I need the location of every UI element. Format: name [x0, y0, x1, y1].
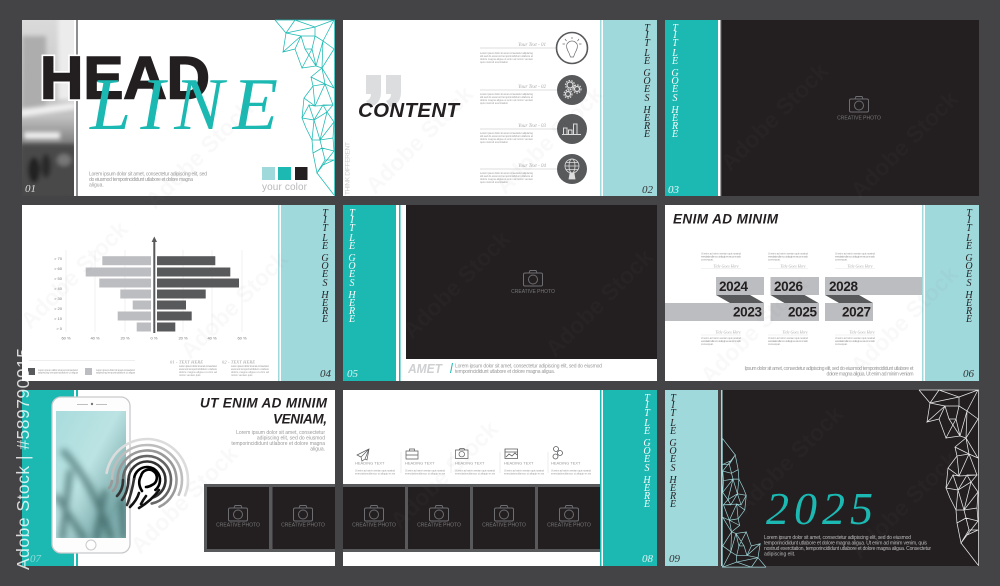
icon: camera	[456, 448, 468, 458]
body text: Lorem ipsum dolor sit amet, consectetur adipiscing elit, sed do eiusmod	[764, 535, 911, 541]
feature text 2: Ut enim ad minim veniam quis nostrud	[405, 468, 446, 472]
notes: 01 - TEXT HERE	[170, 360, 203, 364]
watermarks: Adobe Stock	[360, 81, 478, 199]
notes: dolore magna aligua ut enim ad	[231, 370, 270, 374]
side caption: THINK DIFFERENT	[344, 142, 352, 195]
list item 4: dolore magna aligua ut enim ad minim veniam	[480, 177, 533, 181]
feature text 1: HEADING TEXT	[355, 460, 385, 466]
x labels: 20 %	[178, 336, 188, 340]
page number: 03	[668, 184, 680, 196]
polygon mesh	[275, 20, 334, 196]
feature text 4: Ut enim ad minim veniam quis nostrud	[504, 468, 545, 472]
timeline notes below: Ut enim ad minim veniam quis nostrud	[835, 336, 876, 340]
panel: slide 06 timeline	[665, 205, 979, 381]
watermarks: Adobe Stock	[540, 244, 658, 362]
panel: slide 07 phone	[22, 390, 335, 566]
feature text 2: exercitationullamco ut aliquip ex ea	[405, 472, 446, 476]
notes: eiusmod temporincididunt ut labore	[231, 367, 270, 371]
watermarks: Adobe Stock	[845, 86, 963, 204]
x labels	[61, 336, 247, 340]
list item 3	[480, 124, 557, 144]
timeline notes above: Ut enim ad minim veniam quis nostrud	[701, 252, 742, 256]
polygon mesh: left	[722, 438, 766, 567]
timeline notes below: exercitationullamco ut aliquip ex ea commodo	[701, 339, 742, 343]
list item 3: Your Text - 03	[518, 124, 546, 129]
timeline notes below: consequat.	[768, 342, 781, 346]
panel: slide 02 content	[343, 20, 657, 196]
panel: slide 08 photos	[343, 390, 657, 566]
list item 4: Your Text - 04	[518, 164, 546, 169]
x labels: 60 %	[237, 336, 247, 340]
panel: slide 09 closing	[665, 390, 979, 567]
watermarks: Adobe Stock	[125, 441, 243, 559]
photo strip: CREATIVE PHOTO	[417, 522, 461, 528]
photo placeholder label: CREATIVE PHOTO	[511, 289, 555, 295]
feature text 3	[451, 452, 496, 476]
timeline notes above: consequat.	[701, 258, 714, 262]
list item 2: Lorem ipsum dolor sit amet consectetur adipiscing	[480, 92, 534, 96]
body text: Lorem ipsum dolor sit amet, consectetur	[236, 430, 325, 436]
x labels: 20 %	[120, 336, 130, 340]
y labels: > 40	[54, 286, 63, 291]
watermarks: Adobe Stock	[175, 246, 293, 364]
timeline notes below: Title Goes Here	[849, 330, 875, 334]
y labels: > 10	[54, 316, 63, 321]
timeline notes above: Title Goes Here	[780, 264, 806, 268]
quote mark	[366, 75, 401, 107]
photo strip: CREATIVE PHOTO	[281, 522, 325, 528]
page number: 07	[30, 553, 42, 565]
body text: adipiscing elit.	[764, 552, 795, 558]
polygon mesh: right	[919, 390, 978, 566]
colour swatches	[262, 167, 308, 193]
year: 2025	[766, 483, 873, 534]
body text	[764, 535, 931, 558]
timeline notes below: exercitationullamco ut aliquip ex ea commodo	[835, 339, 876, 343]
list item 4: Lorem ipsum dolor sit amet consectetur adipiscing	[480, 171, 534, 175]
headline: HEAD: HEAD	[40, 44, 210, 112]
vertical title: TITLE GOES HERE	[320, 208, 329, 325]
timeline notes below: consequat.	[701, 342, 714, 346]
feature text 4	[500, 452, 545, 476]
notes: 02 - TEXT HERE	[222, 360, 255, 364]
legend: adipiscing temporincididunt ut aligua	[38, 370, 79, 374]
heading: CONTENT	[358, 99, 460, 122]
timeline notes below: Title Goes Here	[782, 330, 808, 334]
feature text 5: Ut enim ad minim veniam quis nostrud	[551, 468, 592, 472]
stock id watermark: Adobe Stock | #589790915	[13, 348, 33, 570]
photo strip	[204, 484, 335, 552]
body text: adipiscing elit, sed do eiusmod	[257, 436, 325, 442]
legend: Lorem ipsum dolor sit amet consectetur	[96, 368, 135, 372]
heading	[200, 396, 328, 426]
list item 3: Lorem ipsum dolor sit amet consectetur adipiscing	[480, 131, 534, 135]
body text: dolore magna aligua. Ut enim ad minim veniam	[826, 372, 914, 378]
colour swatches: your color	[262, 182, 308, 193]
notes: dolore magna aligua ut enim ad	[179, 370, 218, 374]
panel: slide 04 chart	[22, 205, 335, 381]
panel: slide 01 headline	[20, 16, 335, 198]
timeline ribbons: 2025	[788, 304, 817, 320]
list item 1: Your Text - 01	[518, 43, 546, 48]
watermarks: Adobe Stock	[845, 446, 963, 564]
feature text 4: HEADING TEXT	[504, 460, 534, 466]
photo strip: CREATIVE PHOTO	[482, 522, 526, 528]
timeline ribbons: 2027	[842, 304, 871, 320]
vertical title: TITLE GOES HERE	[668, 393, 677, 510]
legend: adipiscing temporincididunt ut aligua	[96, 370, 136, 374]
notes	[170, 360, 270, 377]
list item 3: elit sed do eiusmod temporincididunt utlabore et	[480, 134, 533, 138]
list item 1: dolore magna aligua ut enim ad minim veniam	[480, 57, 533, 61]
right bars	[157, 256, 239, 332]
body text: temporincididunt utlabore et dolore magna aligua. Ut enim ad minim venim, quis	[764, 540, 928, 546]
timeline notes above: exercitationullamco ut aliquip ex ea commodo	[768, 254, 809, 258]
body text: temporincididunt utlabore et dolore magna	[231, 441, 325, 447]
y labels: > 70	[54, 256, 63, 261]
timeline ribbons: 2028	[829, 279, 858, 294]
caption text: temporincididunt utlabore et dolore magna aligua.	[455, 369, 555, 375]
watermarks: Adobe Stock	[490, 81, 608, 199]
feature text 2	[401, 452, 446, 476]
feature text 5	[548, 452, 592, 476]
icon: lightbulb	[556, 32, 588, 64]
list item 2: quis nostrud exercitation	[480, 101, 509, 105]
list item 1: elit sed do eiusmod temporincididunt utlabore et	[480, 54, 533, 58]
list item 3: dolore magna aligua ut enim ad minim veniam	[480, 137, 533, 141]
feature text 5: HEADING TEXT	[551, 460, 581, 466]
feature text 1: Ut enim ad minim veniam quis nostrud	[355, 468, 396, 472]
page number: 05	[347, 368, 358, 380]
timeline notes below	[701, 330, 876, 346]
page number: 08	[642, 553, 654, 565]
x labels: 40 %	[207, 336, 217, 340]
feature text 1: exercitationullamco ut aliquip ex ea	[355, 472, 396, 476]
x labels: 40 %	[90, 336, 100, 340]
population pyramid chart	[54, 236, 247, 340]
list item 4	[480, 164, 557, 184]
notes: minim veniam quis	[231, 373, 253, 377]
timeline ribbons: 2023	[733, 304, 762, 320]
watermarks: Adobe Stock	[730, 401, 848, 519]
photo placeholder label: CREATIVE PHOTO	[837, 116, 881, 122]
icon: briefcase	[406, 449, 418, 459]
icon: camera	[850, 96, 868, 112]
list item 3: quis nostrud exercitation	[480, 140, 509, 144]
body text: aligua.	[310, 446, 325, 452]
watermarks: Adobe Stock	[385, 416, 503, 534]
y labels: > 30	[54, 296, 63, 301]
icon: paper plane	[357, 449, 369, 461]
timeline notes below: Ut enim ad minim veniam quis nostrud	[701, 336, 742, 340]
timeline notes below: Title Goes Here	[715, 330, 741, 334]
x labels: 0 %	[151, 336, 158, 340]
body text	[744, 366, 914, 378]
icon: camera	[524, 270, 542, 286]
notes: minim veniam quis	[179, 373, 201, 377]
y labels	[54, 256, 63, 331]
headline: LINE: LINE	[89, 64, 278, 146]
photo strip	[343, 484, 600, 552]
body text	[89, 172, 207, 188]
timeline notes above: consequat.	[768, 258, 781, 262]
heading: ENIM AD MINIM	[673, 212, 779, 226]
caption slash	[450, 363, 452, 373]
icon: globe	[557, 154, 587, 184]
timeline notes above: Title Goes Here	[847, 264, 873, 268]
page number: 09	[669, 553, 680, 565]
feature text 1	[355, 460, 396, 476]
list item 2	[480, 85, 557, 105]
caption text: Lorem ipsum dolor sit amet, consectetur adipiscing elit, sed do eiusmod	[455, 364, 602, 370]
headline: HEAD: HEAD	[40, 44, 210, 112]
page number: 06	[963, 368, 974, 380]
axis arrow	[152, 236, 157, 333]
body text: Lorem ipsum dolor sit amet, consectetur adipiscing elit, sed	[89, 172, 207, 178]
page number: 04	[320, 368, 332, 380]
notes: eiusmod temporincididunt ut labore	[179, 367, 218, 371]
y labels: > 50	[54, 276, 63, 281]
feature text 5: exercitationullamco ut aliquip ex ea	[551, 472, 592, 476]
timeline notes above	[701, 252, 876, 268]
body text: do eiusmod temporincididunt utlabore et dolore magna	[89, 177, 193, 183]
list item 1: quis nostrud exercitation	[480, 60, 509, 64]
legend: Lorem ipsum dolor sit amet consectetur	[38, 368, 78, 372]
photo strip: CREATIVE PHOTO	[547, 522, 591, 528]
vertical title: TITLE GOES HERE	[642, 393, 651, 510]
panel: slide 03 photo	[665, 20, 979, 196]
list item 1	[480, 43, 556, 64]
timeline notes above: exercitationullamco ut aliquip ex ea commodo	[701, 254, 742, 258]
vertical title: TITLE GOES HERE	[347, 208, 356, 325]
timeline notes below: consequat.	[835, 342, 848, 346]
list item 2: dolore magna aligua ut enim ad minim veniam	[480, 98, 533, 102]
page number: 01	[25, 183, 36, 195]
list item 1: Lorem ipsum dolor sit amet consectetur adipiscing	[480, 51, 534, 55]
timeline notes above: consequat.	[835, 258, 848, 262]
watermarks: Adobe Stock	[15, 216, 133, 334]
left bars	[86, 256, 151, 332]
panel: slide 05 photo	[343, 205, 657, 381]
y labels: > 0	[56, 326, 63, 331]
timeline ribbons	[665, 277, 922, 321]
notes: Lorem ipsum dolor sit amet consectetur	[231, 364, 269, 368]
y labels: > 20	[54, 306, 63, 311]
list item 2: elit sed do eiusmod temporincididunt utlabore et	[480, 95, 533, 99]
caption text	[455, 364, 602, 375]
icon: gears	[557, 75, 587, 105]
icon: picture	[505, 449, 518, 458]
timeline ribbons: 2024	[719, 279, 748, 294]
body text: Ipsum dolor sit amet, consectetur adipiscing elit, sed do eiusmod temporincididunt utlabore et	[744, 366, 914, 372]
heading: UT ENIM AD MINIM	[200, 396, 328, 410]
body text	[231, 430, 325, 452]
feature text 3: HEADING TEXT	[455, 460, 485, 466]
feature text 2: HEADING TEXT	[405, 460, 435, 466]
vertical title: TITLE GOES HERE	[964, 208, 973, 325]
watermarks: Adobe Stock	[397, 226, 515, 344]
x labels: 60 %	[61, 336, 71, 340]
photo strip: CREATIVE PHOTO	[216, 522, 260, 528]
list item 2: Your Text - 02	[518, 85, 546, 90]
icon: bar chart	[557, 114, 587, 144]
fingerprint	[100, 433, 194, 527]
photo strip: CREATIVE PHOTO	[352, 522, 396, 528]
icon: gears	[553, 446, 562, 459]
legend	[28, 361, 136, 375]
timeline ribbons: 2026	[774, 279, 803, 294]
timeline notes above: exercitationullamco ut aliquip ex ea commodo	[835, 254, 876, 258]
timeline notes below: exercitationullamco ut aliquip ex ea commodo	[768, 339, 809, 343]
watermarks: Adobe Stock	[715, 58, 833, 176]
page number: 02	[642, 184, 654, 196]
timeline notes above: Title Goes Here	[713, 264, 739, 268]
vertical title: TITLE GOES HERE	[642, 23, 651, 140]
watermarks: Adobe Stock	[845, 261, 963, 379]
timeline notes above: Ut enim ad minim veniam quis nostrud	[835, 252, 876, 256]
feature text 3: Ut enim ad minim veniam quis nostrud	[455, 468, 496, 472]
caption heading: AMET	[407, 361, 443, 376]
vertical title: TITLE GOES HERE	[670, 23, 679, 140]
body text: aligua.	[89, 182, 104, 188]
watermarks: Adobe Stock	[695, 271, 813, 389]
list item 4: elit sed do eiusmod temporincididunt utlabore et	[480, 174, 533, 178]
heading: VENIAM,	[273, 412, 327, 426]
photo: blurred street	[22, 20, 74, 196]
phone	[52, 397, 130, 553]
watermarks: Adobe Stock	[140, 96, 258, 214]
timeline notes below: Ut enim ad minim veniam quis nostrud	[768, 336, 809, 340]
feature text 3: exercitationullamco ut aliquip ex ea	[455, 472, 496, 476]
list item 4: quis nostrud exercitation	[480, 180, 509, 184]
notes: Lorem ipsum dolor sit amet consectetur	[179, 364, 217, 368]
feature text 4: exercitationullamco ut aliquip ex ea	[504, 472, 545, 476]
body text: nostrud exercitation, temporincididunt utlabore et dolore magna aligua. Consectetur	[764, 546, 931, 552]
y labels: > 60	[54, 266, 63, 271]
timeline notes above: Ut enim ad minim veniam quis nostrud	[768, 252, 809, 256]
